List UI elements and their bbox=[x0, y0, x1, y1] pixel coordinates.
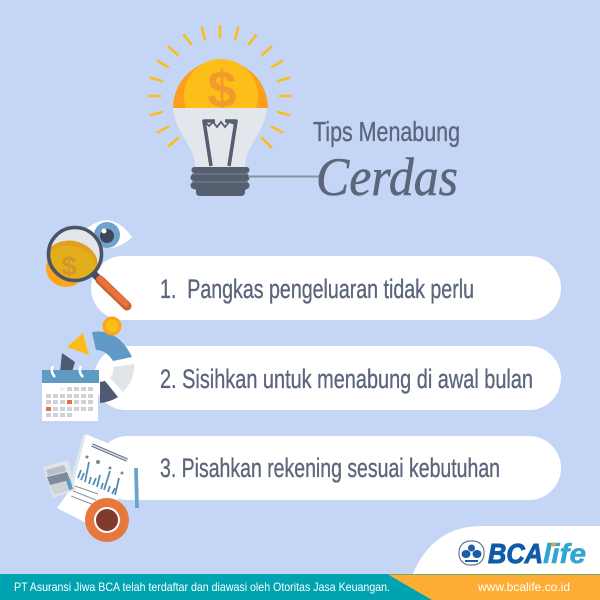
pie segment blue bbox=[92, 332, 132, 361]
lower paper bbox=[57, 490, 120, 530]
calendar page bbox=[42, 383, 98, 421]
icon: light bulb with dollar coin bbox=[149, 26, 291, 196]
footer bar bbox=[0, 574, 600, 600]
lens rim bbox=[48, 228, 102, 280]
icon: calendar and pie chart bbox=[42, 316, 134, 421]
icon: magnifier, eye and coin bbox=[42, 220, 132, 306]
logo panel: life bbox=[543, 538, 586, 569]
bulb rays bbox=[149, 26, 291, 147]
eye bbox=[86, 220, 132, 248]
filament bbox=[204, 121, 236, 166]
report chart bars bbox=[78, 462, 119, 495]
calculator bbox=[43, 460, 76, 498]
bulb base bbox=[190, 167, 250, 196]
calendar rings bbox=[52, 366, 83, 377]
panel: tip 1 bbox=[91, 256, 561, 320]
footer disclosure text: PT Asuransi Jiwa BCA telah terdaftar dan diawasi oleh Otoritas Jasa Keuangan. bbox=[14, 580, 390, 594]
pie segment dark bottom bbox=[100, 381, 118, 403]
report heading bbox=[92, 445, 127, 460]
title line 1: Tips Menabung bbox=[313, 116, 460, 147]
bulb glass bbox=[173, 108, 267, 167]
coin through the lens: $ bbox=[61, 251, 77, 281]
coin bbox=[102, 316, 122, 336]
footer website: www.bcalife.co.id bbox=[477, 580, 570, 594]
logo panel bbox=[412, 526, 600, 576]
logo wordmark: BCA bbox=[488, 538, 543, 569]
report legend dots bbox=[86, 456, 124, 474]
pie segment dark top bbox=[60, 353, 75, 372]
lens bbox=[49, 228, 101, 280]
calendar day cells bbox=[46, 387, 93, 417]
logo emblem bbox=[459, 541, 484, 565]
report paper bbox=[71, 434, 140, 498]
pen bbox=[136, 468, 137, 508]
dollar sign: $ bbox=[208, 61, 237, 119]
icon: report, calculator and coffee bbox=[43, 434, 140, 542]
title line 2 script: Cerdas bbox=[316, 147, 458, 207]
panel: tip 3 bbox=[96, 436, 561, 500]
connector line bbox=[248, 176, 320, 178]
panel: tip 2 bbox=[94, 346, 561, 410]
handle bbox=[93, 273, 100, 280]
coffee cup bbox=[85, 498, 129, 542]
pie segment yellow bbox=[67, 333, 89, 355]
coin bbox=[173, 61, 268, 108]
pie segment grey bbox=[110, 364, 134, 392]
coin behind the lens bbox=[46, 249, 86, 287]
base grooves bbox=[192, 174, 248, 182]
logo orange dot bbox=[551, 542, 556, 547]
calendar header bbox=[42, 370, 99, 383]
tip 1 text: 1. Pangkas pengeluaran tidak perlu bbox=[160, 274, 474, 304]
title bbox=[313, 116, 460, 207]
report text lines bbox=[71, 486, 98, 505]
